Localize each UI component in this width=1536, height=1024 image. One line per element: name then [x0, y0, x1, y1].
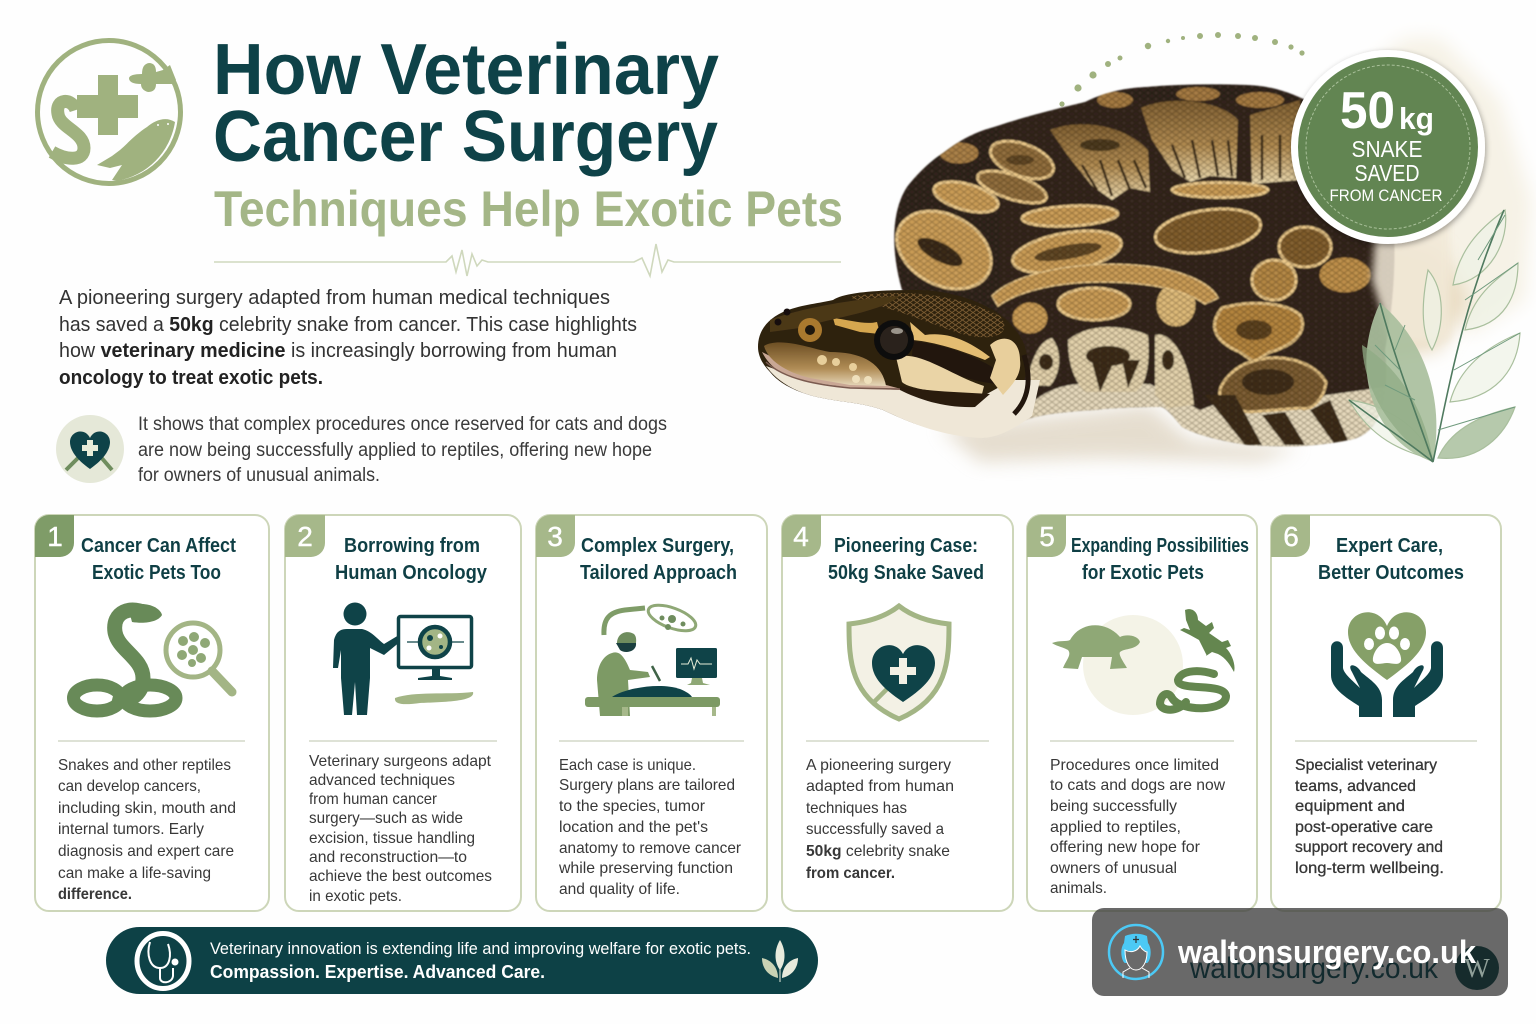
body text 2: and reconstruction—to	[309, 849, 467, 866]
ground shadow	[940, 405, 1300, 462]
dotted arc	[1059, 32, 1305, 107]
icon: turtle, lizard and snake	[1052, 609, 1235, 715]
blotches	[883, 134, 1369, 332]
body text 1: difference.	[58, 886, 132, 903]
bottom banner: Veterinary innovation is extending life and improving welfare for exotic pets.	[210, 939, 751, 958]
icon: leaf sprig	[762, 940, 798, 982]
body text 2: surgery—such as wide	[309, 810, 463, 827]
number badge 4: 4	[793, 521, 809, 552]
body text 3: while preserving function	[558, 860, 733, 877]
heading 4: 50kg Snake Saved	[828, 562, 984, 584]
botanical leaves	[1349, 210, 1520, 462]
body text 2: advanced techniques	[309, 772, 455, 789]
body text 4: adapted from human	[806, 778, 954, 795]
body text 6	[1295, 757, 1444, 877]
heading 2: Human Oncology	[335, 562, 488, 584]
upper lip	[764, 342, 886, 386]
large lower blotch	[1215, 303, 1302, 362]
badge: 50kg snake saved	[1291, 50, 1485, 244]
crown scales	[848, 293, 1004, 337]
card 2: borrowing from human oncology	[285, 515, 521, 911]
number badge 2: 2	[297, 521, 313, 552]
heading 2: Borrowing from	[344, 535, 480, 557]
heading 6	[1318, 535, 1464, 584]
mouth	[762, 352, 905, 390]
body text 5: owners of unusual	[1050, 860, 1177, 877]
watermark: waltonsurgery.co.uk: waltonsurgery.co.uk	[1189, 952, 1439, 985]
icon: stethoscope	[137, 934, 189, 988]
heading 1: Exotic Pets Too	[92, 562, 221, 584]
intro paragraph: how veterinary medicine is increasingly borrowing from human	[59, 340, 617, 362]
body text 5	[1050, 757, 1225, 897]
cream lower mid pieces	[1027, 327, 1194, 408]
heading 6: Better Outcomes	[1318, 562, 1464, 584]
jaw	[766, 366, 1040, 438]
number badge 5: 5	[1039, 521, 1055, 552]
intro paragraph: oncology to treat exotic pets.	[59, 367, 323, 389]
body text 5: Procedures once limited	[1050, 757, 1219, 774]
badge: 50kg snake saved: kg	[1399, 101, 1434, 136]
body text 1: Snakes and other reptiles	[58, 757, 231, 774]
heading 4	[828, 535, 984, 584]
cream belly	[1025, 382, 1381, 448]
icon: heart with cross	[56, 415, 124, 483]
head stripes	[833, 318, 880, 334]
body text 3: Surgery plans are tailored	[559, 777, 735, 794]
number badge 3: 3	[547, 521, 563, 552]
icon: hands holding paw heart	[1331, 612, 1443, 717]
body text 4: successfully saved a	[806, 821, 944, 838]
body text 1: internal tumors. Early	[58, 821, 204, 838]
body text 3: to the species, tumor	[559, 798, 706, 815]
heading 5	[1071, 535, 1249, 584]
body text 1	[58, 757, 236, 903]
intro paragraph: A pioneering surgery adapted from human medical techniques	[59, 287, 610, 309]
icon: surgeon at operating table	[585, 600, 720, 716]
icon: shield with heart	[849, 606, 949, 719]
badge: 50kg snake saved: SAVED	[1354, 160, 1420, 186]
card 4: pioneering case	[782, 515, 1013, 911]
card 3: complex surgery, tailored approach	[536, 515, 767, 911]
body text 6: support recovery and	[1295, 839, 1443, 856]
body text 1: can develop cancers,	[58, 778, 201, 795]
body text 4: techniques has	[806, 800, 907, 817]
number badge 4	[782, 515, 821, 557]
bottom banner: Compassion. Expertise. Advanced Care.	[210, 962, 545, 982]
body text 5: being successfully	[1050, 798, 1177, 815]
pale faded coil at right	[1370, 230, 1470, 360]
body text 5: to cats and dogs are now	[1050, 777, 1225, 794]
watermark: waltonsurgery.co.uk: waltonsurgery.co.uk	[1177, 934, 1476, 970]
bottom banner	[106, 927, 818, 994]
body text 3: and quality of life.	[559, 881, 680, 898]
body text 2	[309, 753, 492, 905]
heading 3: Complex Surgery,	[581, 535, 734, 557]
snake photo illustration	[758, 80, 1470, 462]
title	[213, 30, 843, 237]
intro paragraph	[59, 287, 637, 389]
badge: 50kg snake saved: SNAKE	[1352, 136, 1422, 162]
card 5: expanding possibilities	[1027, 515, 1257, 911]
body text 6: Specialist veterinary	[1295, 757, 1437, 774]
body text 6: long-term wellbeing.	[1295, 860, 1444, 877]
icon: nurse in blue circle	[1109, 925, 1163, 979]
heading 5: Expanding Possibilities	[1071, 535, 1249, 557]
number badge 6	[1271, 515, 1310, 557]
coiled body	[880, 80, 1400, 455]
body text 3	[558, 757, 742, 898]
head	[758, 290, 1027, 437]
heading 1: Cancer Can Affect	[81, 535, 236, 557]
card 6: expert care, better outcomes	[1271, 515, 1501, 911]
number badge 3	[536, 515, 575, 557]
secondary paragraph: are now being successfully applied to reptiles, offering new hope	[138, 440, 652, 461]
background wash behind snake badge	[1300, 38, 1532, 335]
number badge 6: 6	[1283, 521, 1299, 552]
body text 3: Each case is unique.	[559, 757, 696, 774]
body text 3: location and the pet's	[559, 819, 708, 836]
heading 3	[580, 535, 737, 584]
body text 2: Veterinary surgeons adapt	[309, 753, 492, 770]
heading 4: Pioneering Case:	[834, 535, 978, 557]
upper fan blotches	[1050, 124, 1150, 200]
heading 6: Expert Care,	[1336, 535, 1443, 557]
body text 4: A pioneering surgery	[806, 757, 951, 774]
title: Cancer Surgery	[213, 97, 718, 177]
title: Techniques Help Exotic Pets	[214, 181, 843, 237]
body text 5: offering new hope for	[1050, 839, 1201, 856]
body text 2: from human cancer	[309, 791, 438, 808]
card 1: cancer can affect exotic pets too	[35, 515, 269, 911]
body text 4	[806, 757, 954, 882]
secondary paragraph: It shows that complex procedures once reserved for cats and dogs	[138, 414, 667, 435]
badge: 50kg snake saved: 50	[1340, 82, 1395, 140]
body text 6: teams, advanced	[1295, 778, 1416, 795]
badge: 50kg snake saved: FROM CANCER	[1330, 186, 1442, 205]
logo: snake, cross and bird in circle	[38, 40, 180, 184]
icon: person pointing at monitor	[333, 602, 473, 715]
icon: snake with magnifier	[74, 604, 232, 711]
secondary paragraph: for owners of unusual animals.	[138, 465, 380, 486]
heading 5: for Exotic Pets	[1082, 562, 1204, 584]
watermark: waltonsurgery.co.uk	[1092, 908, 1508, 996]
body text 4: 50kg celebrity snake	[806, 843, 950, 860]
heading 1	[81, 535, 236, 584]
number badge 2	[285, 515, 325, 557]
secondary paragraph	[138, 414, 667, 486]
body text 2: excision, tissue handling	[309, 830, 475, 847]
heading 3: Tailored Approach	[580, 562, 737, 584]
body text 5: applied to reptiles,	[1050, 819, 1181, 836]
body text 4: from cancer.	[806, 865, 895, 882]
body text 6: equipment and	[1295, 798, 1405, 815]
inner dark marks	[914, 155, 1103, 272]
body text 1: diagnosis and expert care	[58, 843, 234, 860]
body text 6: post-operative care	[1295, 819, 1433, 836]
heartbeat divider	[214, 244, 841, 276]
heading 2	[335, 535, 488, 584]
intro paragraph: has saved a 50kg celebrity snake from cancer. This case highlights	[59, 314, 637, 336]
body text 3: anatomy to remove cancer	[559, 840, 742, 857]
body text 2: achieve the best outcomes	[309, 868, 492, 885]
number badge 5	[1027, 515, 1066, 557]
body text 1: can make a life-saving	[58, 865, 211, 882]
body text 5: animals.	[1050, 880, 1107, 897]
fade on right side of snake	[1372, 200, 1450, 345]
number badge 1: 1	[47, 521, 63, 552]
watermark: waltonsurgery.co.uk: W	[1464, 953, 1490, 983]
arc band	[992, 264, 1218, 306]
body text 2: in exotic pets.	[309, 888, 402, 905]
body text 1: including skin, mouth and	[58, 800, 236, 817]
title: How Veterinary	[213, 30, 719, 110]
number badge 1	[35, 515, 74, 557]
